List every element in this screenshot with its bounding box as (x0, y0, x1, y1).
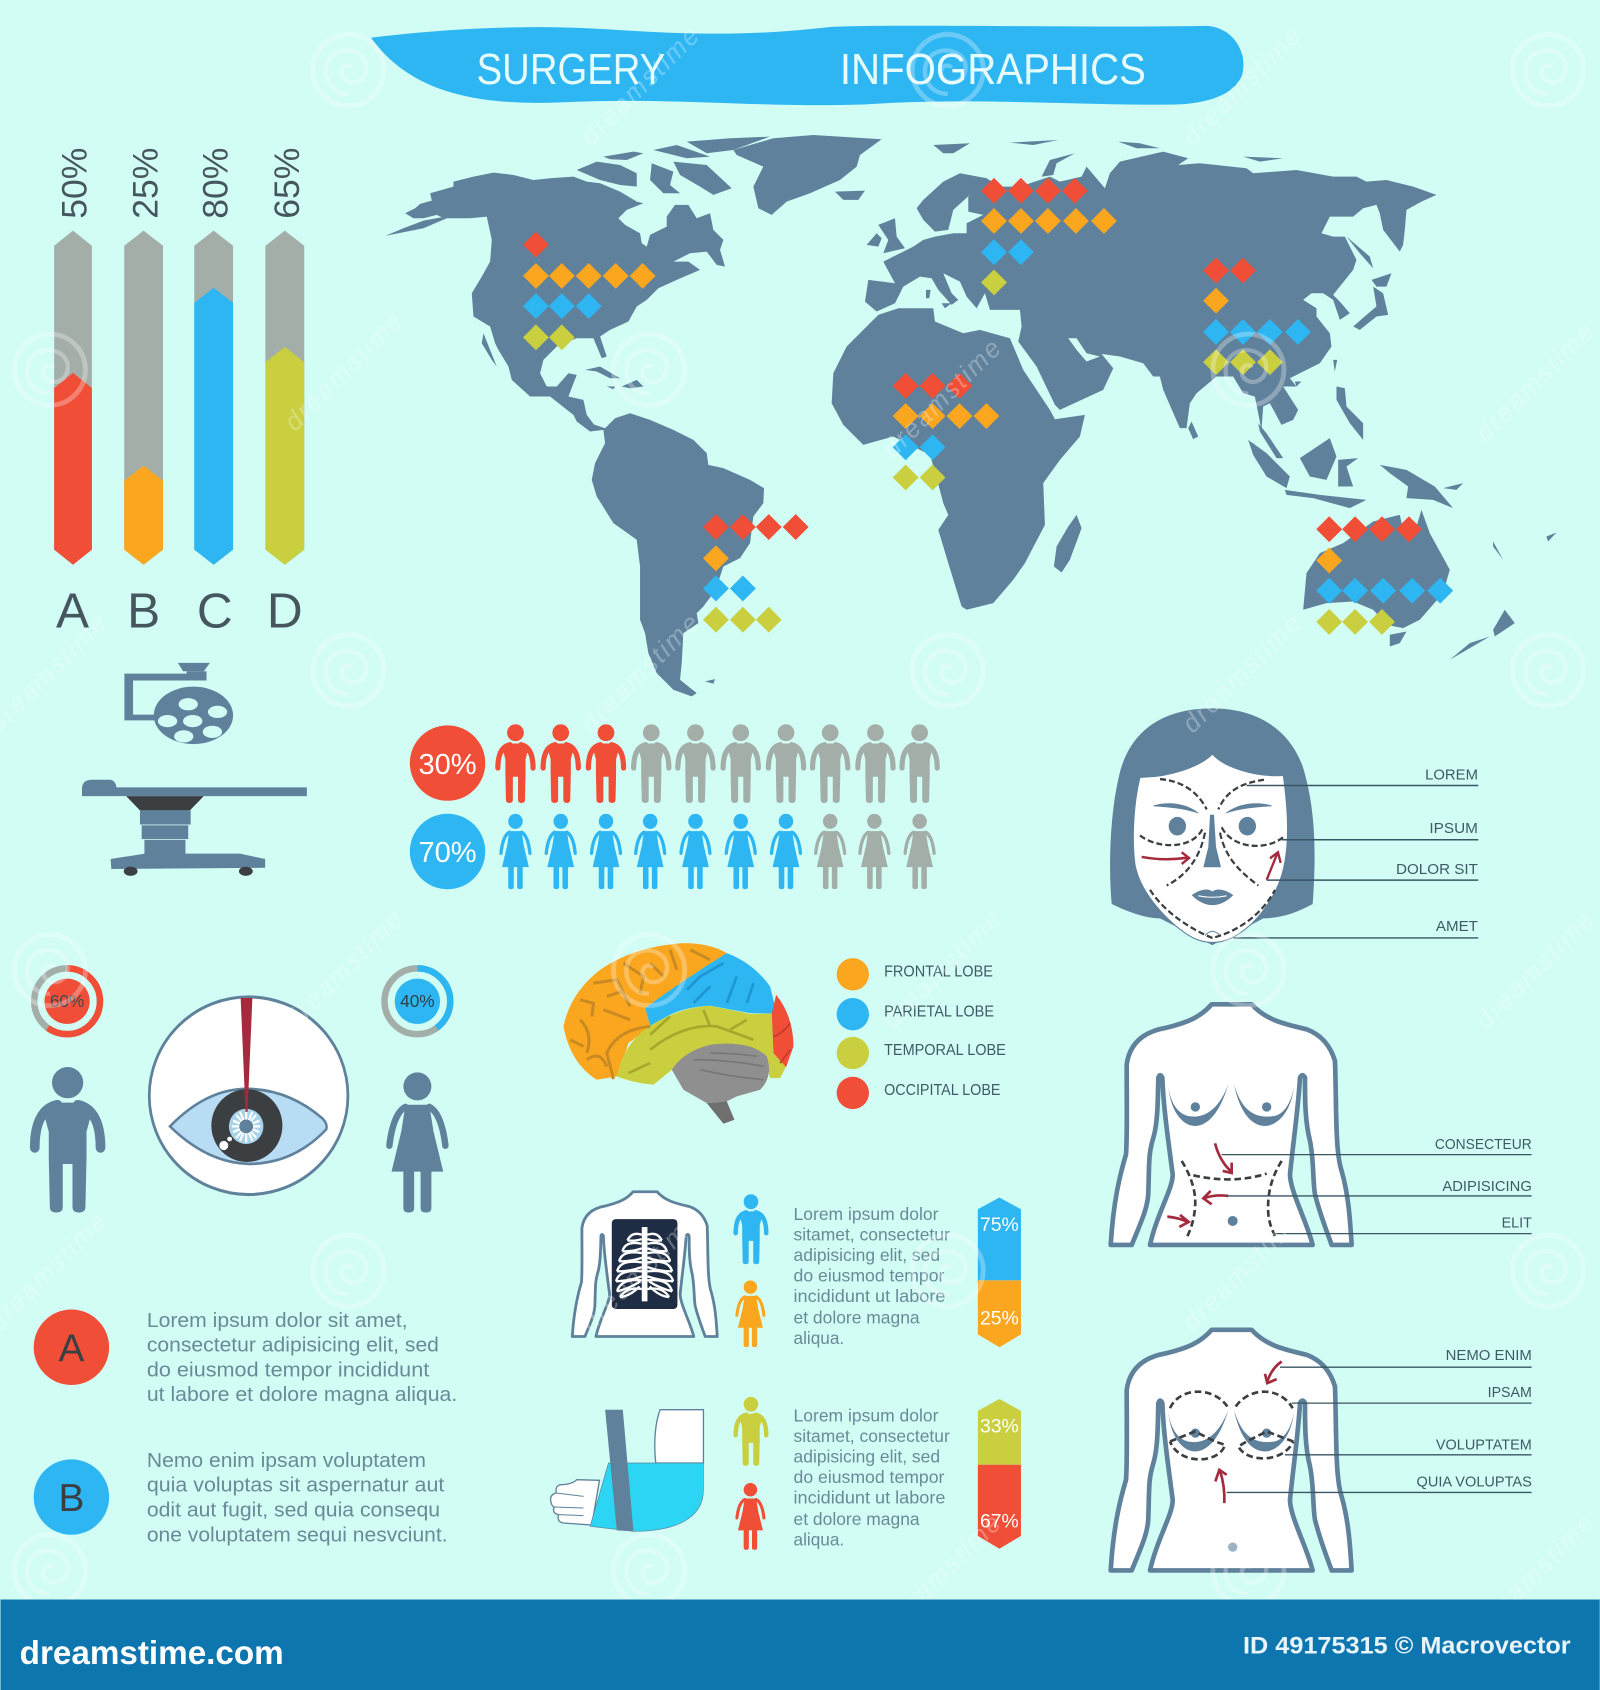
bar chart: A B C D percentages: 25% (126, 148, 166, 219)
bar chart: A B C D percentages: 50% (54, 148, 94, 219)
text block: sling lorem: do eiusmod tempor (794, 1467, 945, 1487)
callout B: Nemo enim ipsam voluptatem (147, 1449, 426, 1472)
text: dreamstime (280, 306, 410, 437)
text: dreamstime (1471, 317, 1600, 448)
panel: woman face surgery: LOREM (1425, 766, 1478, 783)
text: dreamstime (280, 904, 410, 1035)
bar chart: A B C D percentages: A (56, 582, 89, 638)
callout B: quia voluptas sit aspernatur aut (147, 1474, 445, 1497)
panel: breast surgery: VOLUPTATEM (1436, 1437, 1532, 1454)
callout A: do eiusmod tempor incididunt (147, 1358, 430, 1381)
icon: operating table (82, 780, 307, 876)
text block: x-ray lorem: Lorem ipsum dolor (794, 1204, 939, 1224)
title banner: INFOGRAPHICS (840, 46, 1146, 94)
panel: woman face surgery: DOLOR SIT (1396, 861, 1478, 878)
footer band (0, 1599, 1600, 1690)
text: dreamstime (576, 1206, 707, 1337)
map markers: Europe (981, 178, 1117, 295)
text: dreamstime (878, 1508, 1008, 1639)
people chart: 30% men (410, 724, 937, 803)
callout B (34, 1449, 448, 1546)
callout A: A (58, 1327, 84, 1370)
panel: woman face surgery: AMET (1436, 918, 1478, 935)
panel: woman face surgery (1110, 708, 1478, 945)
icon: red woman (737, 1483, 764, 1550)
text block: sling lorem: Lorem ipsum dolor (794, 1406, 939, 1426)
text block: sling lorem: aliqua. (794, 1530, 844, 1550)
map markers: Asia (1203, 258, 1311, 375)
icon: man (35, 1067, 101, 1213)
footer band: ID 49175315 © Macrovector (1243, 1633, 1571, 1659)
text block: x-ray lorem: sitamet, consectetur (794, 1225, 950, 1245)
legend: brain lobes: FRONTAL LOBE (884, 963, 993, 980)
legend: brain lobes (837, 958, 1006, 1109)
text: dreamstime (1177, 608, 1308, 739)
footer band: dreamstime.com (20, 1635, 284, 1672)
text block: sling lorem: sitamet, consectetur (794, 1426, 950, 1446)
bar chart: A B C D percentages: D (267, 582, 303, 638)
bar chart: A B C D percentages (54, 148, 307, 638)
brain diagram (563, 943, 793, 1124)
panel: breast surgery (1111, 1330, 1532, 1570)
text: dreamstime (1177, 21, 1308, 151)
map markers: Africa (893, 373, 999, 490)
donut: 60% men: 60% (50, 991, 84, 1011)
legend: brain lobes: TEMPORAL LOBE (884, 1042, 1006, 1059)
bar chart: A B C D percentages: C (197, 582, 233, 638)
panel: abdomen surgery (1111, 1004, 1532, 1245)
icon: arm sling (551, 1410, 703, 1531)
panel: abdomen surgery: ELIT (1502, 1215, 1532, 1232)
bar chart: A B C D percentages: B (127, 582, 160, 638)
text: dreamstime (1177, 1206, 1308, 1337)
icon: blue man (736, 1194, 766, 1264)
hex bar: 75% / 25%: 25% (980, 1308, 1019, 1330)
title banner (371, 26, 1243, 105)
hex bar: 33% / 67%: 67% (980, 1510, 1019, 1532)
legend: brain lobes: OCCIPITAL LOBE (884, 1082, 1000, 1099)
text block: x-ray lorem (794, 1204, 950, 1348)
icon: woman (389, 1072, 445, 1213)
map markers: North America (523, 232, 656, 350)
text: dreamstime (1471, 904, 1600, 1035)
bar chart: A B C D percentages: 80% (196, 148, 236, 219)
donut: 40% women: 40% (400, 991, 435, 1011)
text: dreamstime (878, 333, 1008, 464)
hex bar: 33% / 67%: 33% (980, 1415, 1019, 1437)
icon: orange woman (737, 1280, 764, 1347)
text: dreamstime (576, 608, 707, 739)
hex bar: 75% / 25% (978, 1197, 1021, 1347)
text block: x-ray lorem: do eiusmod tempor (794, 1266, 945, 1286)
people chart: 70% women (410, 814, 934, 889)
icon: green man (736, 1397, 766, 1466)
text block: sling lorem (794, 1406, 950, 1550)
text block: x-ray lorem: aliqua. (794, 1328, 844, 1348)
hex bar: 33% / 67% (978, 1399, 1021, 1549)
panel: abdomen surgery: CONSECTEUR (1435, 1136, 1532, 1153)
donut: 40% women (385, 968, 450, 1034)
callout A (34, 1309, 457, 1406)
legend: brain lobes: PARIETAL LOBE (884, 1003, 994, 1020)
text block: x-ray lorem: adipisicing elit, sed (794, 1245, 940, 1265)
callout A: consectetur adipisicing elit, sed (147, 1334, 439, 1357)
panel: chest x-ray torso (572, 1192, 717, 1337)
text block: sling lorem: et dolore magna (794, 1509, 920, 1529)
callout A: ut labore et dolore magna aliqua. (147, 1383, 457, 1406)
donut: 60% men (34, 968, 100, 1034)
panel: breast surgery: NEMO ENIM (1446, 1347, 1532, 1364)
text: dreamstime (1471, 1508, 1600, 1639)
icon: surgical lamp (124, 663, 233, 744)
text block: sling lorem: adipisicing elit, sed (794, 1447, 940, 1467)
map markers: South America (703, 514, 809, 633)
title banner: SURGERY (477, 46, 665, 94)
world map (385, 135, 1556, 696)
text: dreamstime (576, 21, 707, 151)
panel: eye laser surgery (149, 997, 348, 1195)
panel: breast surgery: IPSAM (1488, 1384, 1532, 1401)
hex bar: 75% / 25%: 75% (980, 1214, 1019, 1236)
callout B: one voluptatem sequi nesvciunt. (147, 1523, 448, 1546)
bar chart: A B C D percentages: 65% (267, 148, 307, 219)
panel: abdomen surgery: ADIPISICING (1442, 1178, 1532, 1195)
callout A: Lorem ipsum dolor sit amet, (147, 1309, 408, 1332)
text block: x-ray lorem: et dolore magna (794, 1308, 920, 1328)
map markers: Australia (1316, 516, 1453, 635)
callout B: B (58, 1477, 84, 1520)
people chart: 70% women: 70% (418, 837, 477, 869)
callout B: odit aut fugit, sed quia consequ (147, 1498, 440, 1521)
panel: woman face surgery: IPSUM (1429, 820, 1478, 837)
text: dreamstime (878, 904, 1008, 1035)
text block: x-ray lorem: incididunt ut labore (794, 1286, 946, 1306)
text block: sling lorem: incididunt ut labore (794, 1488, 946, 1508)
people chart: 30% men: 30% (418, 749, 477, 781)
panel: breast surgery: QUIA VOLUPTAS (1417, 1473, 1532, 1490)
